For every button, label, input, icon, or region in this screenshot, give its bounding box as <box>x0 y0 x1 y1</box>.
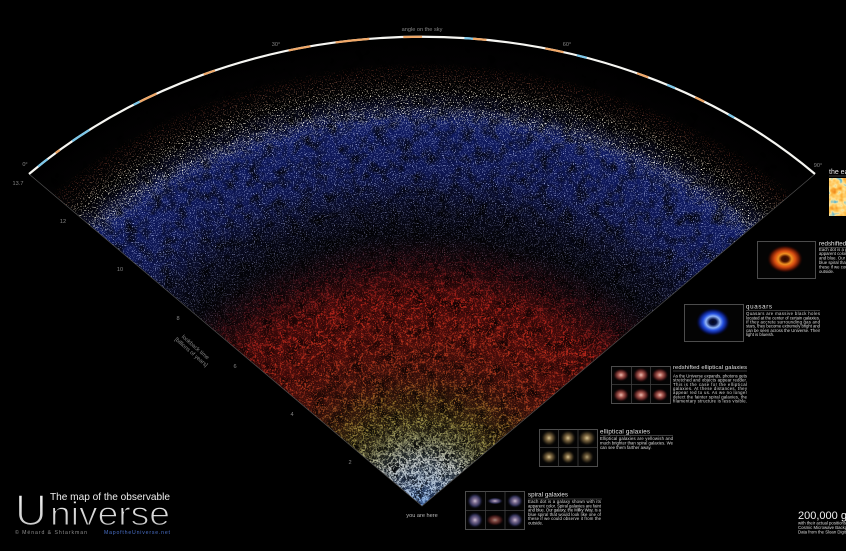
quasars text: stars, they become extremely bright and <box>746 324 821 329</box>
map of galaxies wedge <box>54 64 791 506</box>
redshifted elliptical text: stretched and objects appear redder. <box>673 378 747 383</box>
redshifted elliptical text: filamentary structure is less visible. <box>673 399 747 404</box>
panel: quasars <box>684 304 822 342</box>
redshifted elliptical text: As the Universe expands, photons gets <box>673 374 747 378</box>
galaxy dots <box>86 104 758 504</box>
website: MapoftheUniverse.net <box>104 530 171 536</box>
redshifted elliptical text: This is the case for the elliptical <box>673 382 747 387</box>
credits: © Ménard & Shtarkman <box>15 529 87 536</box>
axis title: lookback time: lookback time <box>180 334 210 361</box>
axis: lookback time labels: 2 <box>348 460 352 466</box>
panel: spiral galaxies <box>466 492 602 530</box>
spiral text: apparent color. Spiral galaxies are faint <box>528 503 602 508</box>
axis: angle labels: 90° <box>814 163 822 169</box>
title block <box>15 486 171 536</box>
spiral thumbnails <box>466 492 524 530</box>
redshifted elliptical text: detect the fainter spiral galaxies, the <box>673 394 748 399</box>
spiral text: blue spiral that would look like one of <box>528 512 602 517</box>
axis: angle labels: 30° <box>272 42 280 48</box>
redshifted quasars text: outside. <box>819 269 834 274</box>
filament structure <box>206 245 640 504</box>
nearby bright filaments <box>350 416 495 506</box>
redshifted elliptical thumbnails <box>612 366 670 404</box>
sky arc: cosmic microwave background <box>29 37 815 174</box>
axis: lookback time labels: 4 <box>290 412 294 418</box>
axis title: lookback time: [billions of years] <box>173 337 209 369</box>
spiral text: outside. <box>528 520 543 526</box>
panel: redshifted elliptical galaxies <box>612 365 749 404</box>
spiral text: these if we could observe it from the <box>528 516 602 521</box>
spiral text: Each dot is a galaxy shown with its <box>528 499 601 504</box>
spiral text: and blue. Our galaxy, the Milky Way, is a <box>528 508 602 513</box>
axis: lookback time labels: you are here <box>406 513 438 519</box>
elliptical text: much brighter than spiral galaxies. We <box>600 440 674 445</box>
axis: lookback time labels <box>13 181 438 519</box>
axis: angle labels: angle on the sky <box>402 27 443 33</box>
spiral heading: spiral galaxies <box>528 492 568 498</box>
panel: elliptical galaxies <box>540 428 674 466</box>
axis: lookback time labels: 8 <box>176 316 180 322</box>
wedge layers <box>54 64 791 506</box>
axis: lookback time labels: 12 <box>60 219 66 225</box>
redshifted quasar thumbnail <box>758 242 816 278</box>
quasars text: can be seen across the Universe. Their <box>746 328 821 333</box>
title: Universe: niverse <box>50 495 170 532</box>
quasars text: light is blueish. <box>746 332 774 337</box>
quasars text: located at the center of certain galaxies. <box>746 315 820 320</box>
axis: lookback time labels: 10 <box>117 267 123 273</box>
axis: angle labels: 60° <box>563 42 571 48</box>
axis: angle labels: 0° <box>22 162 28 168</box>
quasars text: If they accrete surrounding gas and <box>746 320 821 325</box>
title: Universe: U <box>15 486 47 535</box>
colour haze by distance <box>78 92 767 506</box>
outer quasar band dots <box>54 64 791 239</box>
axis: angle labels <box>22 27 822 169</box>
panel: 200,000 galaxies <box>798 510 846 534</box>
quasars heading: quasars <box>746 304 772 310</box>
redshifted elliptical text: appear red to us. As we no longer <box>673 390 748 395</box>
quasars text: Quasars are massive black holes <box>746 311 820 316</box>
panel: the early Universe <box>829 169 846 216</box>
title: The map of the observable: The map of the observable <box>50 492 170 503</box>
elliptical text: can see them farther away. <box>600 445 652 450</box>
cosmic microwave background map <box>829 178 846 216</box>
redshifted elliptical heading: redshifted elliptical galaxies <box>673 365 747 371</box>
axis: lookback time labels: 13.7 <box>13 181 23 187</box>
redshifted elliptical text: galaxies. At these distances, they <box>673 386 748 391</box>
quasar thumbnail <box>684 304 744 342</box>
axis: lookback time labels: 6 <box>233 364 237 370</box>
elliptical heading: elliptical galaxies <box>600 428 650 436</box>
elliptical text: Elliptical galaxies are yellowish and <box>600 436 674 441</box>
wedge edge lines <box>29 174 815 506</box>
panel: redshifted quasars <box>758 240 846 278</box>
elliptical thumbnails <box>540 430 598 466</box>
